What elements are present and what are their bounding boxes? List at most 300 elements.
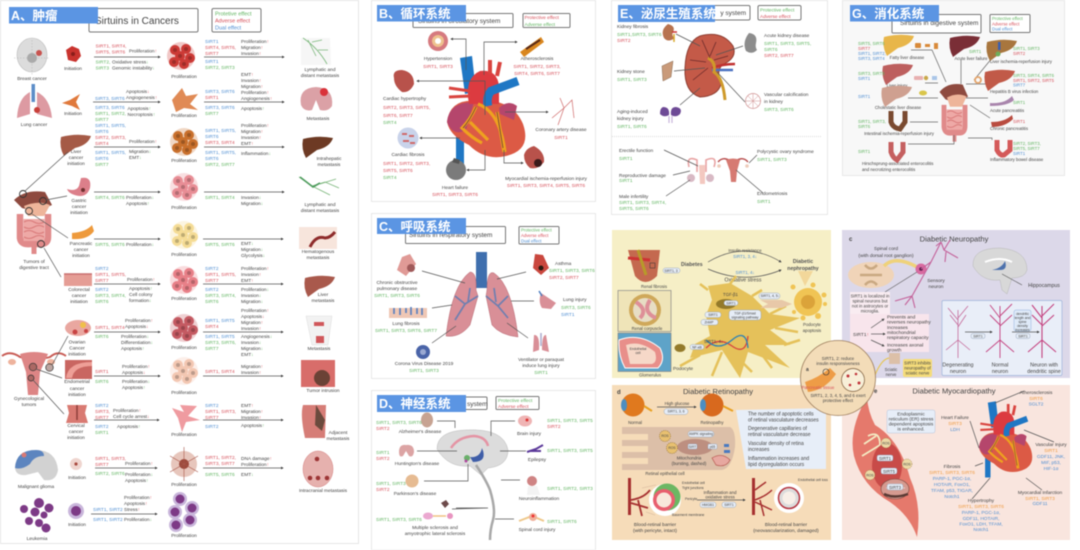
row: pancreatic cancer: SIRT5, SIRT6 (205, 242, 235, 248)
icon: normal eye: Normal (628, 420, 642, 425)
box: SIRT1 effects: mitochondrial (887, 330, 916, 336)
row: lung cancer: Metastasis (307, 116, 330, 122)
title: diabetic myocardiopathy (874, 386, 996, 396)
row: lung cancer: SIRT3, SIRT6 (205, 105, 235, 111)
icon: gynecological tract with callouts: tumors (22, 402, 37, 408)
legend: urogenital: Protective effect (760, 8, 795, 14)
box: SIRT1 localization: microglia. (861, 308, 879, 314)
icon: digestive tract with callouts (14, 152, 68, 277)
icon: spinal cord (848, 246, 917, 288)
disease: intestinal ischemia: SIRT1, SIRT3, (858, 119, 886, 124)
labels: heart e: PARP-1, PGC-1α, (962, 510, 1000, 516)
row: liver cancer: SIRT6 (95, 156, 109, 162)
row: ovarian cancer: Invasion↓ (241, 340, 261, 346)
disease: chronic pancreatitis: SIRT1 (1013, 119, 1026, 124)
row: colorectal cancer: Proliferation↑ (241, 266, 269, 272)
row: cervical cancer: metastasis (327, 436, 350, 442)
row: breast cancer: SIRT1, SIRT4, (96, 44, 127, 50)
disease: fatty liver: SIRT7 (858, 46, 871, 51)
disease: atherosclerosis: SIRT4, SIRT6, SIRT7 (514, 71, 560, 77)
row: liver cancer: Proliferation↑ (129, 139, 157, 145)
disease: cardiac fibrosis: SIRT5, SIRT6 (383, 168, 413, 174)
legend: cancers: Protetive effect (215, 12, 252, 18)
disease: Hirschsprung enterocolitis (858, 142, 933, 172)
row: leukemia: SIRT1, SIRT2 (93, 507, 123, 513)
disease: Hirschsprung enterocolitis: SIRT1 (858, 149, 871, 154)
icon: glomerulus box: cell (635, 351, 641, 355)
icon: retinal epithelial cell (622, 427, 735, 476)
labels: heart e: Notch1 (944, 494, 960, 500)
row: lung cancer: Proliferation (171, 113, 197, 119)
disease: lung injury: SIRT1 (561, 312, 575, 318)
signalling pills: signaling pathway (732, 316, 759, 320)
box: SIRT1 effects: respiratory capacity (887, 335, 929, 341)
arrow: inflammation: Inflammation and (704, 490, 737, 495)
row: colorectal cancer: Liver (318, 292, 329, 298)
row: cervical cancer: Proliferation (171, 432, 197, 438)
row: colorectal cancer: formation↓ (129, 298, 151, 304)
disease: kidney fibrosis: SIRT2 (617, 38, 631, 44)
disease: Parkinson's: SIRT2 (376, 487, 390, 493)
legend: nervous: Protective effect (498, 398, 533, 404)
title: diabetic neuropathy: Diabetic Neuropathy (920, 234, 989, 244)
row: breast cancer: SIRT7 (205, 51, 219, 57)
labels: heart e (929, 390, 1067, 533)
row: pancreatic cancer: Glycolysis↓ (241, 253, 265, 259)
row: liver cancer: SIRT1, SIRT5, (205, 150, 236, 156)
disease: Huntington's: SIRT1 (376, 450, 390, 456)
row: breast cancer: distant metastasis (301, 73, 340, 79)
disease: fatty liver: SIRT5, SIRT6 (858, 41, 885, 46)
row: lung cancer: Migration↑ (241, 84, 263, 90)
legend: cancers (212, 8, 261, 32)
disease: Alzheimer's: SIRT1, SIRT3, SIRT6 (376, 420, 422, 426)
callout: retinopathy findings: Inflammation increases and (748, 456, 809, 462)
row: cervical cancer: Adjacent (329, 430, 348, 436)
labels: heart e: FoxO1, LDH, TFAM, (959, 522, 1003, 528)
row: breast cancer: Genomic instability↓ (112, 66, 155, 72)
signalling pills: SIRT1, 4↓ (704, 339, 723, 344)
disease: neuroinflammation: Neuroinflammation (519, 496, 559, 502)
row: cervical cancer: Apoptosis↑ (241, 423, 264, 429)
icon: brain hippocampus: Hippocampus (1028, 283, 1060, 289)
disease: aging kidney injury: Aging-induced (617, 109, 648, 115)
diabetes pathways: Diabetes (681, 262, 703, 268)
box: neurons: neuron (950, 369, 966, 375)
disease: heart failure: SIRT1, SIRT3, SIRT6 (432, 192, 478, 198)
labels: reproductive: Erectile function (619, 148, 653, 154)
panel E: urogenital (612, 0, 828, 214)
legend: respiratory: Protective effect (521, 228, 553, 232)
icon: kidney with renal fibrosis (628, 250, 667, 289)
disease: heart failure (432, 158, 478, 198)
disease: chronic pancreatitis (990, 115, 1028, 131)
icon: retinopathy eye (700, 394, 733, 425)
labels: heart e: Heart Failure (941, 415, 969, 421)
callout: retinopathy findings: Degenerative capillaries of (748, 426, 808, 432)
disease: vascular calcification: SIRT3, SIRT6 (764, 107, 794, 113)
icon: blood-retinal barrier intact: (with pericyte, intact) (633, 528, 677, 534)
row: cervical cancer: Migration↑ (241, 409, 263, 415)
legend: urogenital (758, 6, 801, 20)
signalling pills (674, 292, 792, 352)
disease: aging kidney injury: SIRT1, SIRT6 (617, 124, 647, 130)
row: lung cancer: SIRT3, SIRT6 (205, 89, 235, 95)
heading label D (377, 395, 466, 412)
row: cervical cancer: SIRT1 (95, 430, 109, 436)
row: cervical cancer: Invasion↑ (241, 415, 261, 421)
row: leukemia: Initiation (68, 522, 86, 528)
row: ovarian cancer: SIRT4 (205, 324, 219, 330)
icon: male reproductive system (687, 159, 715, 184)
disease: liver injury: Liver injury (887, 83, 908, 88)
disease: cardiac hypertrophy: SIRT2, SIRT3, SIRT5, (383, 105, 430, 111)
disease: epilepsy (527, 445, 593, 463)
diabetes pathways: Insulin resistance (728, 248, 762, 253)
row: gastric cancer: Invasion↓ (241, 195, 261, 201)
row: endometrial cancer: SIRT1 (95, 369, 109, 375)
title box: circulatory: Sirtuins in circulatory system (418, 18, 500, 25)
icon: retinal epithelial cell: ROS (661, 434, 669, 438)
box: SIRT1 effects: Increases (887, 325, 908, 331)
row: cervical cancer: Cell cycle arrest↓ (113, 414, 150, 420)
title box: respiratory (406, 226, 506, 244)
row: endometrial cancer: cancer (70, 386, 85, 392)
icon: muscle cell: SIRT5 (883, 469, 896, 474)
labels: heart e: GDF11 (1032, 501, 1048, 507)
disease: acute pancreatitis: Acute pancreatitis (990, 108, 1024, 113)
legend: circulatory (523, 14, 570, 28)
labels: heart e: LDH (950, 427, 960, 433)
box: SIRT3 sciatic: neuropathy of (904, 366, 931, 370)
row: malignant glioma (15, 447, 348, 494)
box: SIRT3 sciatic: sciatic nerve (906, 370, 930, 376)
disease: COVID-19: Corona Virus Disease 2019 (395, 361, 454, 367)
row: ovarian cancer: Proliferation↓ (121, 334, 149, 340)
icon: blood-retinal barrier intact: Basement membrane (672, 513, 705, 517)
icon: lungs (446, 252, 518, 337)
disease: COPD: Chronic obstructive (376, 280, 418, 286)
labels: reproductive: SIRT1, SIRT3, SIRT4, (619, 200, 666, 206)
box: SIRT3 sciatic: SIRT3 inhibits (904, 360, 931, 366)
diabetes pathways: Oxidative stress (725, 278, 762, 284)
icon: muscle cell: ROS (903, 462, 911, 466)
legend: cancers: Dual effect (215, 26, 242, 32)
disease: kidney fibrosis: Kidney fibrosis (617, 24, 649, 30)
row: lung cancer: Proliferation↑ (241, 90, 269, 96)
row: cervical cancer: SIRT2 (95, 403, 109, 409)
disease: Alzheimer's (376, 412, 442, 435)
disease: COPD (374, 254, 420, 299)
box: SIRT1 localization (850, 292, 890, 314)
row: gastric cancer: cancer (72, 204, 87, 210)
row: malignant glioma: SIRT7 (95, 462, 109, 468)
icon: digestive tract (940, 84, 968, 142)
disease: COPD: pulmonary disease (377, 286, 417, 292)
icon: retinal epithelial cell: ROS (668, 446, 676, 450)
panel D: nervous (372, 390, 596, 550)
row: colorectal cancer: Proliferation↑ (127, 277, 155, 283)
callout: retinopathy findings: The number of apoptotic cells (748, 412, 814, 418)
disease: Huntington's: Huntington's disease (395, 461, 440, 467)
label: podocyte: Podocyte (673, 366, 693, 372)
disease: vascular calcification (746, 92, 809, 113)
box: SIRT1 localization: spinal neurons but (852, 298, 888, 304)
icon: podocyte apoptosis (790, 271, 827, 333)
row: ovarian cancer: SIRT7 (205, 346, 219, 352)
title: diabetic myocardiopathy: Diabetic Myocardiopathy (912, 386, 996, 396)
leader lines: digestive (908, 50, 997, 144)
icon: retinal epithelial cell: p65 (710, 445, 715, 449)
row: malignant glioma: Initiation (68, 475, 86, 481)
disease: cholestatic liver (858, 86, 927, 110)
disease: coronary artery (535, 98, 587, 141)
panel G: digestive (842, 0, 1064, 176)
row: endometrial cancer: Proliferation↑ (122, 364, 150, 370)
icon: renal corpuscle box: Renal corpuscle (632, 326, 663, 331)
disease: hepatitis B: Hepatitis B virus infection (990, 89, 1039, 94)
diabetes pathways: nephropathy (787, 266, 819, 272)
diabetes pathways: SIRT1, 3, 4↓ (733, 254, 757, 259)
row: liver cancer: Migration↓ (129, 149, 151, 155)
callout: ER stress: dependent apoptosis (889, 422, 934, 428)
central circle a: pancreas: protective effect (823, 398, 854, 403)
icon: retinal epithelial cell: Retinal epithelial cell (645, 471, 685, 476)
disease: heart failure: Heart failure (442, 185, 468, 191)
disease: cholestatic liver: Cholestatic liver disease (875, 105, 922, 110)
row: lung cancer: Necroptosis↑ (128, 112, 155, 118)
disease: aging kidney injury: kidney injury (617, 116, 644, 122)
row: ovarian cancer: Invasion↑ (241, 326, 261, 332)
row: cervical cancer: SIRT2 (95, 424, 109, 430)
disease: acute kidney: SIRT6 (764, 47, 778, 53)
arrow: inflammation: SIRT1 (724, 503, 734, 507)
disease: fatty liver: SIRT3, SIRT4 (858, 56, 885, 61)
row: ovarian cancer: EMT↓ (241, 352, 254, 358)
icon: gynecological tract with callouts (2, 336, 68, 414)
disease: intestinal ischemia (858, 111, 935, 136)
disease: cardiac hypertrophy (383, 70, 430, 126)
legend: nervous: Adverse effect (498, 404, 529, 410)
row: liver cancer: cancer (69, 155, 84, 161)
icon: kidney with renal fibrosis: Renal fibrosis (641, 284, 667, 289)
row: malignant glioma: Proliferation↑ (241, 462, 269, 468)
row: cervical cancer: initiation (67, 435, 85, 441)
disease: coronary artery: Coronary artery disease (535, 127, 587, 133)
row: colorectal cancer: initiation (70, 299, 88, 305)
disease: neuroinflammation (519, 476, 593, 502)
row: ovarian cancer: Migration↓ (241, 346, 263, 352)
disease: inflammatory bowel: Inflammatory bowel disease (990, 157, 1044, 162)
row: liver cancer: Invasion↑ (241, 135, 261, 141)
arrow: inflammation: oxidative stress (705, 494, 735, 500)
icon: podocyte apoptosis: apoptosis (803, 328, 821, 333)
icon: sensory neuron: neuron (929, 284, 944, 290)
disease: cardiac hypertrophy: SIRT6, SIRT7 (383, 113, 413, 119)
row: ovarian cancer: SIRT1, SIRT5 (205, 318, 235, 324)
disease: multiple sclerosis: SIRT1, SIRT3, SIRT6 (376, 517, 422, 523)
title box: urogenital: y system (720, 10, 746, 17)
row: breast cancer: Initiation (64, 66, 82, 72)
row: ovarian cancer: Angiogenesis↓ (241, 334, 272, 340)
disease: liver injury: SIRT1 (858, 76, 871, 81)
row: cervical cancer: SIRT7 (95, 415, 109, 421)
signalling pills: SIRT1 (708, 313, 718, 317)
row: pancreatic cancer: Migration↓ (241, 247, 263, 253)
row: pancreatic cancer: initiation (72, 253, 90, 259)
legend: digestive: Adverse effect (992, 21, 1020, 26)
panel e: diabetic myocardiopathy (842, 385, 1070, 540)
box: neurons: Degenerating (942, 362, 974, 368)
box: neurons: Neuron with (1030, 362, 1058, 368)
signalling pills: SIRT1 (726, 301, 736, 305)
disease: COVID-19 (395, 345, 454, 374)
disease: atherosclerosis: Atherosclerosis (521, 56, 554, 62)
row: colorectal cancer: cancer (72, 293, 87, 299)
disease: spinal cord injury: Spinal cord injury (519, 527, 556, 533)
row: endometrial cancer: Proliferation (171, 390, 197, 396)
box: neurons: SIRT1 (1018, 334, 1028, 338)
arrow: high glucose (657, 401, 696, 414)
box: neurons: length and (1015, 316, 1031, 320)
row: liver cancer: EMT↓ (129, 155, 142, 161)
labels: heart e: SGLT2 (1029, 402, 1044, 408)
title box: nervous: system (467, 401, 488, 408)
box: neurons: dendritic spine (1027, 369, 1061, 375)
row: endometrial cancer: Apoptosis↑ (122, 385, 145, 391)
labels: heart e: SIRT1, SIRT3 (1025, 496, 1055, 502)
icon: large kidney (685, 34, 735, 100)
labels: reproductive: SIRT5, SIRT6 (619, 206, 649, 212)
labels: reproductive (619, 148, 814, 212)
disease: hypertension: Hypertension (424, 56, 452, 62)
icon: blood-retinal barrier intact: Pericyte (685, 497, 697, 501)
signalling pills: TGF-β1 (723, 292, 738, 297)
icon: blood-retinal barrier damaged: (neovascularization, damaged) (753, 528, 819, 534)
heading label B: B、循环系统 (379, 6, 451, 21)
labels: heart e: Fibrosis (944, 464, 961, 470)
icon: retinal epithelial cell: SIRT (689, 445, 696, 449)
row: colorectal cancer: SIRT2 (205, 287, 219, 293)
disease: kidney stone: Kidney stone (617, 69, 645, 75)
row: pancreatic cancer: EMT↓ (241, 241, 254, 247)
connector lines: heart (417, 39, 548, 170)
title box: nervous (430, 397, 488, 410)
disease: Hirschsprung enterocolitis: Hirschsprung-associated enterocolitis (862, 161, 933, 166)
row: ovarian cancer: SIRT3, SIRT6, (205, 340, 236, 346)
row: malignant glioma: SIRT2, SIRT6 (95, 471, 125, 477)
icon: glomerulus box (618, 333, 671, 378)
row: colorectal cancer: SIRT1, SIRT5, (205, 272, 236, 278)
leader lines: kidney (674, 34, 745, 105)
disease: Alzheimer's: Alzheimer's disease (399, 429, 442, 435)
disease: lung fibrosis (375, 307, 437, 334)
disease: inflammatory bowel: SIRT5, SIRT7 (1013, 146, 1040, 151)
row: breast cancer: SIRT3 (96, 66, 109, 72)
row: endometrial cancer: Endometrial (64, 379, 90, 385)
title box: urogenital (690, 6, 750, 20)
disease: lung injury: SIRT3, SIRT6 (561, 305, 591, 311)
labels: heart e: GDF11, JNK, (1037, 454, 1065, 460)
row: pancreatic cancer: metastasis (307, 255, 330, 261)
row: colorectal cancer: Proliferation (171, 296, 197, 302)
labels: heart e: MIF, p53, (1041, 460, 1061, 466)
legend: cancers: Adverse effect (215, 18, 251, 24)
row: breast cancer: SIRT4, SIRT6, (205, 45, 236, 51)
title: diabetic retinopathy: Diabetic Retinopathy (683, 387, 753, 396)
row: colorectal cancer: SIRT2 (205, 266, 219, 272)
heading label G: G、消化系统 (852, 6, 925, 21)
box: SIRT1 effects: Increases axonal (887, 342, 923, 348)
panel F: diabetic nephropathy (612, 230, 831, 378)
legend: circulatory: Adverse effect (524, 22, 556, 28)
arrow: inflammation (697, 490, 745, 508)
signalling pills: ZnMP (704, 320, 714, 324)
row: cervical cancer: Apoptosis↑ (117, 424, 140, 430)
box: SIRT3 sciatic (903, 359, 932, 377)
row: gastric cancer: Lymphatic and (304, 202, 336, 208)
legend: circulatory: Protective effect (524, 15, 559, 21)
leader lines: brain (417, 421, 526, 519)
title: diabetic retinopathy (617, 387, 753, 396)
row: leukemia: Apoptosis↑ (124, 501, 147, 507)
row: ovarian cancer (65, 308, 332, 358)
row: pancreatic cancer: cancer (74, 247, 89, 253)
box: neurons: spine (1018, 320, 1027, 324)
heading label E: E、泌尿生殖系统 (620, 6, 716, 21)
box: neurons: Normal (992, 362, 1008, 368)
disease: acute liver failure: Acute liver failure (955, 56, 988, 61)
row: breast cancer: Invasion↑ (241, 51, 261, 57)
row: liver cancer: EMT↑ (241, 141, 254, 147)
row: colorectal cancer: SIRT3, SIRT4, (95, 293, 126, 299)
pill: SIRT1,3 kidney: SIRT1, 3 (664, 269, 678, 273)
legend: respiratory (519, 226, 559, 244)
row: lung cancer: Lung cancer (21, 122, 48, 128)
disease: Huntington's: SIRT2 (376, 456, 390, 462)
disease: Parkinson's (376, 474, 437, 497)
leader lines: lungs (422, 271, 534, 343)
disease: brain injury (517, 416, 593, 437)
row: breast cancer: SIRT1 (205, 59, 219, 65)
title: diabetic neuropathy (849, 234, 989, 244)
labels: reproductive: Polycystic ovary syndrome (757, 149, 814, 155)
disease: myocardial ischemia: SIRT1, SIRT3, SIRT4, SIRT5, SIRT6 (507, 183, 585, 189)
disease: acute kidney: Acute kidney disease (764, 33, 810, 39)
callout: retinopathy findings: increases (748, 447, 770, 453)
heading label G (850, 5, 939, 22)
row: pancreatic cancer: SIRT5, SIRT6 (95, 242, 125, 248)
title box: digestive (892, 14, 981, 33)
row: liver cancer: Migration↑ (241, 129, 263, 135)
legend: digestive: Protective effect (992, 16, 1024, 21)
box: neurons: SIRT1 (973, 334, 983, 338)
podocyte cell body (680, 276, 800, 378)
disease: lung injury (539, 291, 591, 318)
row: liver cancer: SIRT1, SIRT5, (205, 128, 236, 134)
row: liver cancer: SIRT6 (205, 156, 219, 162)
row: ovarian cancer: Proliferation↑ (241, 308, 269, 314)
row: cervical cancer: SIRT2 (205, 403, 219, 409)
row: breast cancer: SIRT1 (205, 39, 219, 45)
labels: heart e: GDF11, HOTAIR, (963, 516, 999, 522)
row: liver cancer: SIRT6 (95, 129, 109, 135)
disease: cardiac fibrosis (383, 128, 430, 181)
arrow: high glucose: High glucose (665, 401, 690, 406)
disease: cardiac fibrosis: SIRT1, SIRT2, SIRT3, (383, 161, 430, 167)
central circle a: pancreas: Pancreatic tissue (802, 385, 835, 390)
diabetes pathways (681, 248, 819, 284)
